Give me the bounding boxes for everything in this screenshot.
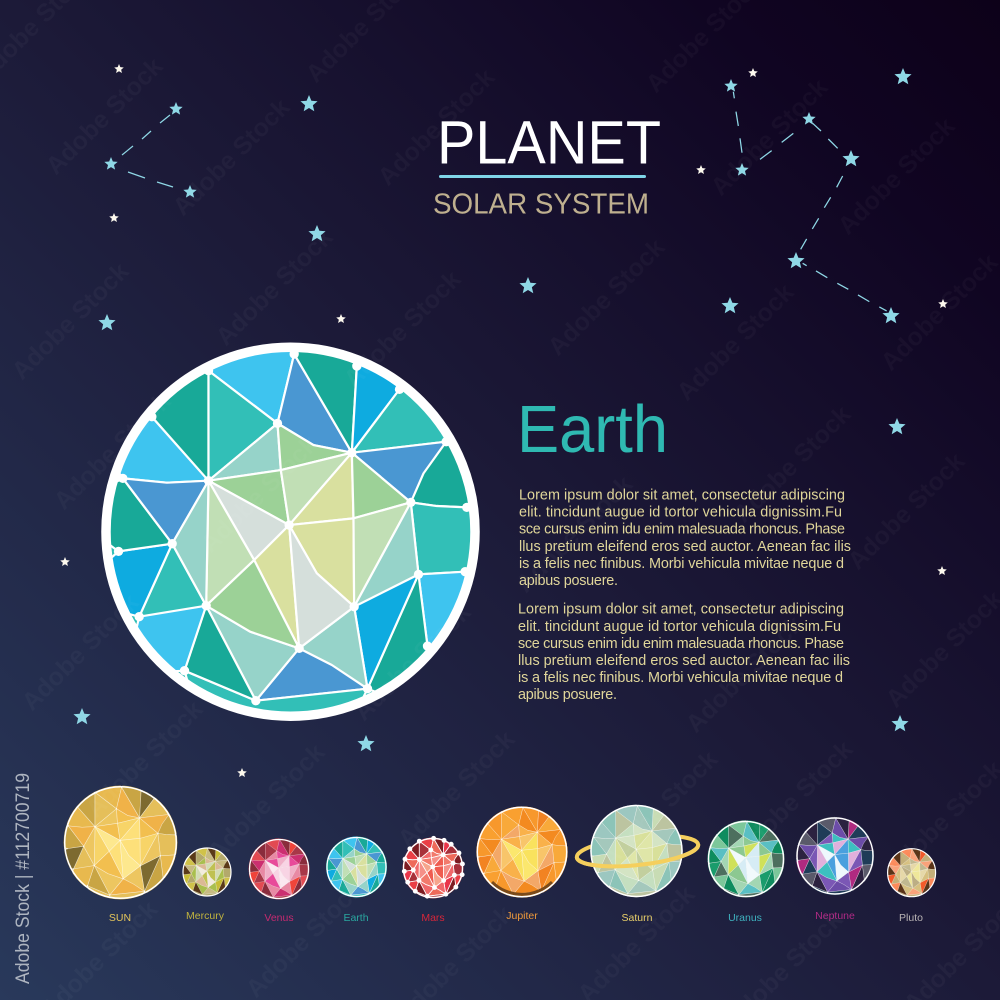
constellation: right [733, 92, 887, 311]
watermark pattern: Adobe Stock [167, 93, 295, 221]
watermark pattern: Adobe Stock [16, 588, 144, 716]
text block 2 [518, 602, 850, 703]
watermark pattern: Adobe Stock [680, 610, 808, 738]
saturn ring: back [575, 831, 700, 871]
planet: Mercury [177, 841, 238, 903]
watermark pattern: Adobe Stock [728, 400, 856, 528]
subtitle: SOLAR SYSTEM [433, 188, 649, 220]
watermark pattern: Adobe Stock [875, 248, 1000, 376]
planet: Earth [318, 828, 395, 906]
constellation: left [122, 115, 173, 187]
label: Sun: SUN [109, 912, 131, 924]
text block 2: llus pretium eleifend eros sed auctor. Aenean fac ilis [518, 653, 850, 669]
planet: Pluto [881, 842, 942, 904]
saturn ring: front [577, 845, 698, 866]
text block 1: apibus posuere. [519, 573, 618, 589]
planet row [49, 770, 942, 924]
text block 1: llus pretium eleifend eros sed auctor. Aenean fac ilis [519, 539, 851, 555]
planet: Uranus [698, 810, 795, 909]
watermark pattern: Adobe Stock [202, 738, 330, 866]
stars: white [60, 64, 948, 777]
watermark pattern: Adobe Stock [832, 112, 960, 240]
stars: blue [73, 68, 912, 751]
planet: Neptune [786, 806, 885, 906]
label: Jupiter: Jupiter [506, 910, 538, 922]
stock id text: Adobe Stock | #112700719 [12, 773, 34, 984]
label: Venus: Venus [264, 912, 294, 924]
label: Neptune: Neptune [815, 910, 855, 922]
watermark pattern: Adobe Stock [338, 265, 466, 393]
watermark pattern: Adobe Stock [195, 430, 323, 558]
heading: planet: PLANET [437, 108, 661, 177]
text block 2: apibus posuere. [518, 687, 617, 703]
text block 2: is a felis nec finibus. Morbi vehicula mivitae neque d [518, 670, 843, 686]
label: Mercury: Mercury [186, 910, 225, 922]
watermark pattern: Adobe Stock [730, 735, 858, 863]
planet: Sun [49, 770, 193, 916]
watermark pattern: Adobe Stock [80, 695, 208, 823]
watermark pattern: Adobe Stock [392, 725, 520, 853]
planet: Jupiter [465, 794, 580, 911]
text block 2: sce cursus enim idu enim malesuada rhoncus. Phase [518, 636, 844, 652]
watermark pattern: Adobe Stock [210, 223, 338, 351]
watermark pattern: Adobe Stock [48, 387, 176, 515]
title underline [439, 175, 646, 178]
planet: Venus [241, 830, 318, 908]
heading: Earth: Earth [517, 392, 668, 467]
label: Earth: Earth [343, 912, 369, 924]
jupiter shadow rim [492, 882, 552, 894]
watermark pattern: Adobe Stock [40, 52, 168, 180]
text block 1: elit. tincidunt augue id tortor vehicula dignissim.Fu [519, 505, 842, 521]
planet: Saturn [575, 792, 700, 910]
text block 1: sce cursus enim idu enim malesuada rhoncus. Phase [519, 522, 845, 538]
title [433, 108, 661, 220]
watermark pattern: Adobe Stock [348, 598, 476, 726]
text block 1: Lorem ipsum dolor sit amet, consectetur adipiscing [519, 488, 845, 504]
planet: Mars [395, 829, 472, 907]
watermark pattern: Adobe Stock [372, 63, 500, 191]
watermark pattern: Adobe Stock [240, 875, 368, 1000]
label: Mars: Mars [421, 912, 445, 924]
saturn body [579, 792, 695, 910]
label: Saturn: Saturn [622, 912, 653, 924]
text block 1: is a felis nec finibus. Morbi vehicula mivitae neque d [519, 556, 844, 572]
text block 1 [519, 488, 851, 589]
watermark pattern: Adobe Stock [595, 745, 723, 873]
label: Pluto: Pluto [899, 912, 923, 924]
planet: large Earth [62, 298, 522, 767]
watermark pattern: Adobe Stock [842, 447, 970, 575]
watermark pattern: Adobe Stock [542, 233, 670, 361]
watermark pattern: Adobe Stock [671, 278, 799, 406]
text block 2: Lorem ipsum dolor sit amet, consectetur adipiscing [518, 602, 844, 618]
watermark pattern: Adobe Stock [6, 257, 134, 385]
watermark pattern: Adobe Stock [510, 470, 638, 598]
label: Uranus: Uranus [728, 912, 762, 924]
watermark pattern: Adobe Stock [705, 73, 833, 201]
text block 2: elit. tincidunt augue id tortor vehicula dignissim.Fu [518, 619, 841, 635]
